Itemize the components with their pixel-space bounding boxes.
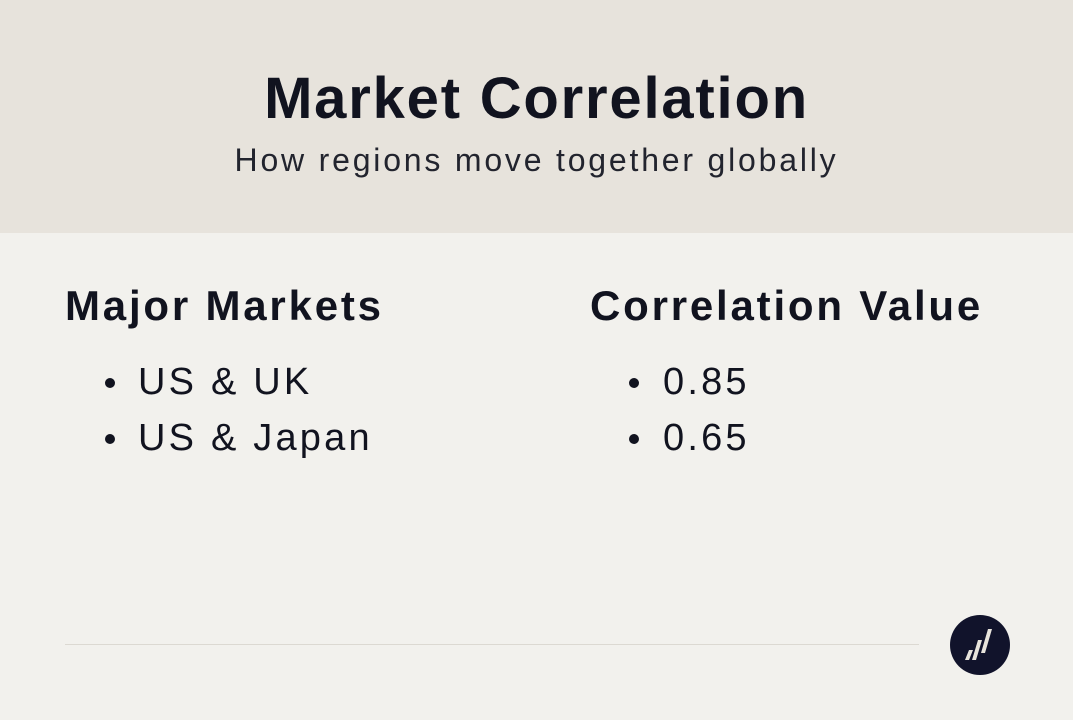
panel: major markets <box>65 282 384 459</box>
subtitle: How regions move together globally <box>235 142 838 178</box>
heading: major markets: Major Markets <box>65 282 384 329</box>
panel: correlation values <box>590 282 983 459</box>
list item: 0.65: 0.65 <box>663 417 750 459</box>
icon: logo <box>950 615 1010 675</box>
list item: US & Japan: US & Japan <box>138 417 373 459</box>
list item: 0.85: 0.85 <box>663 361 750 403</box>
list item: US & UK: US & UK <box>138 361 312 403</box>
heading: correlation value: Correlation Value <box>590 282 983 329</box>
header band <box>0 0 1073 233</box>
title: Market Correlation <box>264 66 809 131</box>
